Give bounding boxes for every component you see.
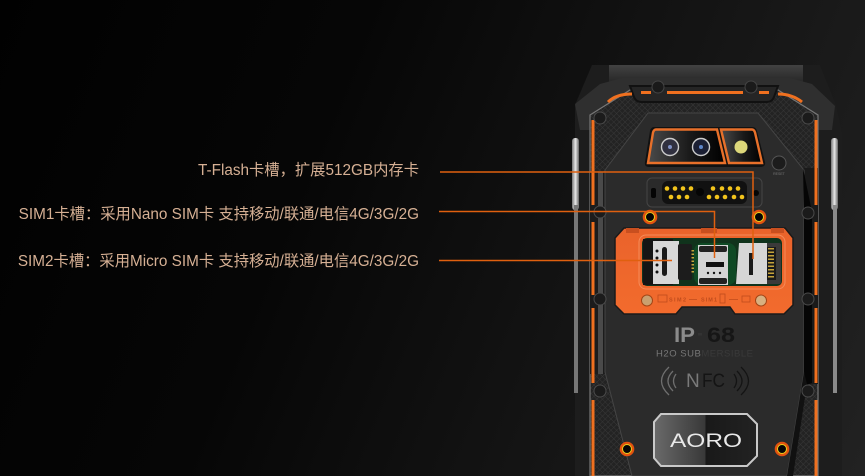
reset button	[772, 156, 786, 176]
reset button: RESET	[773, 172, 786, 176]
SIM2 leader	[439, 260, 672, 262]
SIM1 leader	[439, 212, 714, 258]
side strips	[590, 172, 606, 374]
SIM2 slot	[643, 239, 693, 285]
tray markings: SIM2	[669, 298, 686, 304]
tray markings: SIM1	[701, 298, 717, 304]
label: SIM1 slot: SIM1卡槽：采用Nano SIM卡 支持移动/联通/电信4G/3G/2G	[19, 206, 419, 223]
AORO badge	[654, 414, 757, 466]
label: T-Flash slot: T-Flash卡槽，扩展512GB内存卡	[198, 162, 419, 179]
SIM1 slot	[694, 243, 736, 285]
NFC logo: N	[686, 371, 700, 392]
pogo pin connector	[647, 178, 762, 207]
screws on frame	[594, 112, 814, 397]
NFC logo: FC	[702, 371, 725, 392]
centre plate	[605, 113, 804, 476]
T-Flash slot	[736, 243, 781, 284]
IP-68 logo	[656, 324, 753, 360]
tray markings	[642, 294, 766, 306]
phone body	[572, 65, 842, 476]
camera module	[645, 127, 765, 167]
NFC logo	[662, 367, 748, 395]
side metal rails	[572, 138, 838, 393]
T-Flash leader	[440, 172, 753, 259]
label: SIM2 slot: SIM2卡槽：采用Micro SIM卡 支持移动/联通/电信4G/3G/2G	[18, 253, 419, 270]
orange trim	[593, 94, 816, 476]
IP-68 logo: H2O SUBMERSIBLE	[656, 348, 753, 360]
IP-68 logo: IP	[674, 324, 695, 347]
top clip	[630, 81, 778, 102]
SIM tray	[615, 228, 793, 314]
AORO badge: AORO	[670, 431, 742, 452]
IP-68 logo: 68	[707, 324, 735, 347]
orange screws	[620, 210, 789, 456]
leader lines	[439, 172, 753, 260]
